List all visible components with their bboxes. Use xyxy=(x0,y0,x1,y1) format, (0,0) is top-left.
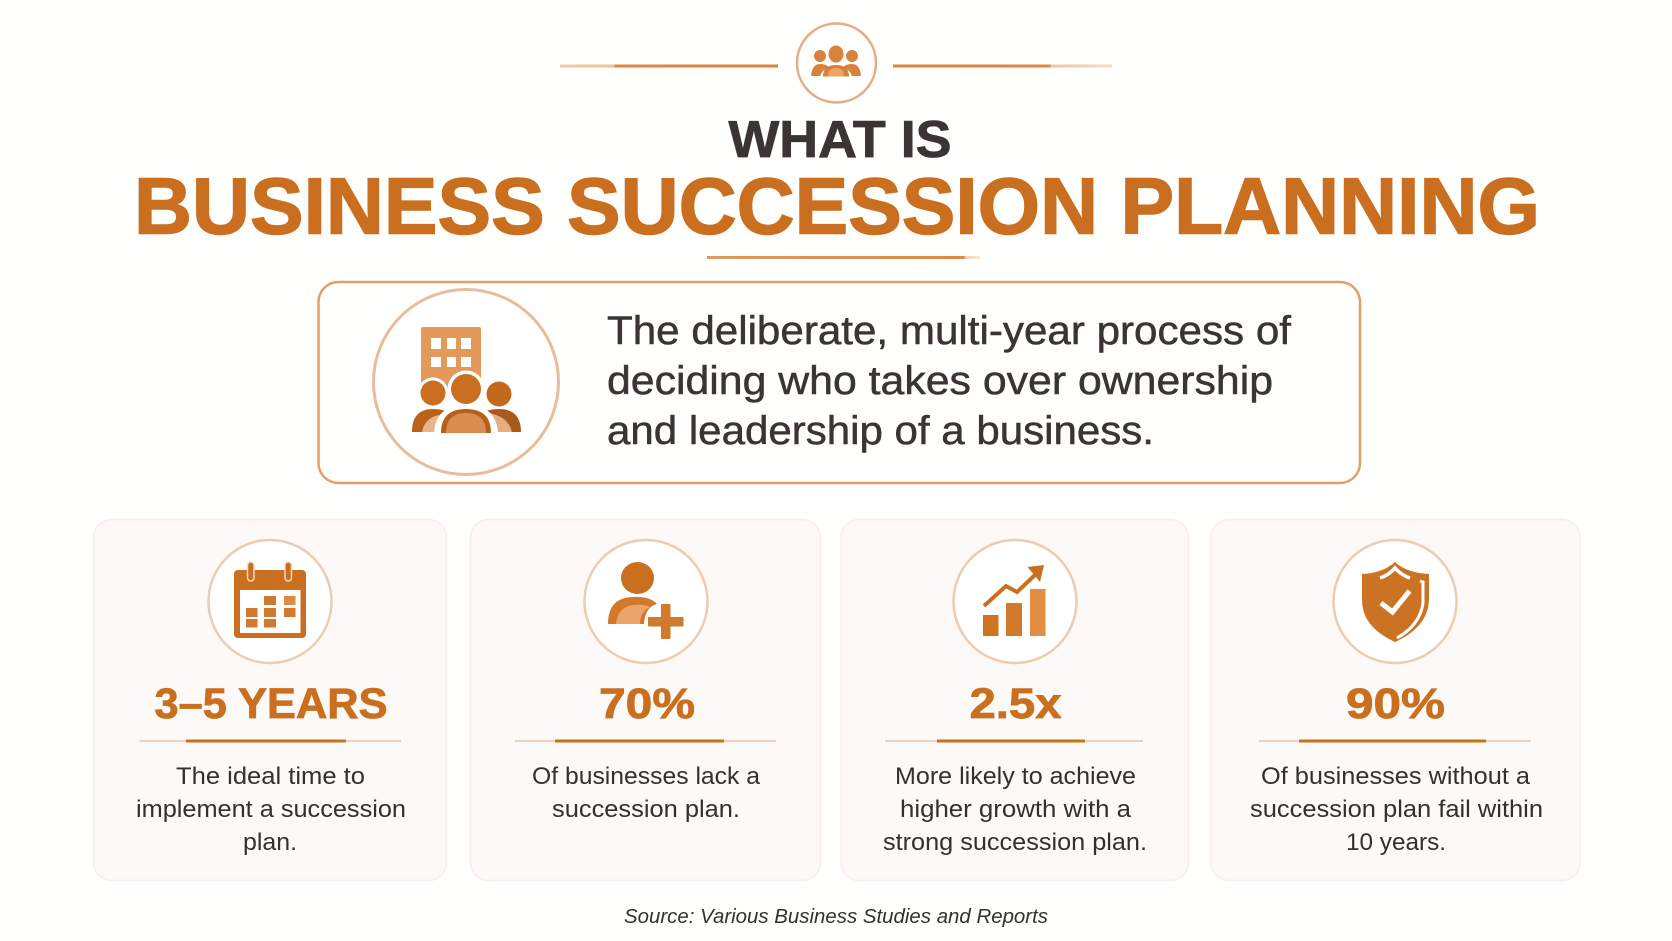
divider xyxy=(1259,740,1531,742)
stat: 2.5x: 2.5x xyxy=(970,680,1062,728)
stat: 70%: 70% xyxy=(599,680,695,728)
description: More likely to achieve xyxy=(895,763,1136,790)
description: succession plan. xyxy=(552,796,740,823)
stat: 90%: 90% xyxy=(1346,680,1445,728)
definition text: The deliberate, multi-year process of xyxy=(607,309,1292,353)
title line 1: WHAT IS xyxy=(728,111,952,169)
divider xyxy=(140,740,401,742)
definition text xyxy=(607,309,1292,453)
description xyxy=(883,763,1147,856)
divider xyxy=(515,740,776,742)
source note: Source: Various Business Studies and Reports xyxy=(624,905,1048,928)
panel: 2.5x stat card xyxy=(841,520,1188,880)
divider xyxy=(885,740,1143,742)
icon: growth chart xyxy=(954,540,1076,663)
stat: 3-5 years: 3–5 YEARS xyxy=(154,680,388,728)
description: Of businesses without a xyxy=(1261,763,1531,790)
description: succession plan fail within xyxy=(1250,796,1543,823)
panel: 3-5 years stat card xyxy=(94,520,446,880)
description xyxy=(532,763,761,823)
header ornament with people icon xyxy=(560,24,1112,102)
description: higher growth with a xyxy=(900,796,1132,823)
title line 2: BUSINESS SUCCESSION PLANNING xyxy=(134,162,1540,250)
description: 10 years. xyxy=(1346,829,1446,856)
definition text: and leadership of a business. xyxy=(607,409,1154,453)
panel: 90% stat card xyxy=(1211,520,1580,880)
description xyxy=(136,763,406,856)
icon: building with three people xyxy=(374,290,558,474)
description: implement a succession xyxy=(136,796,406,823)
panel: 70% stat card xyxy=(470,520,820,880)
title underline xyxy=(707,256,980,259)
icon: shield with check xyxy=(1334,540,1456,663)
description: plan. xyxy=(243,829,297,856)
description xyxy=(1250,763,1543,856)
description: The ideal time to xyxy=(176,763,365,790)
description: strong succession plan. xyxy=(883,829,1147,856)
icon: three people xyxy=(811,46,861,76)
panel: definition xyxy=(318,282,1360,483)
icon: person with plus xyxy=(584,540,708,663)
definition text: deciding who takes over ownership xyxy=(607,359,1273,403)
icon: calendar xyxy=(208,540,332,663)
description: Of businesses lack a xyxy=(532,763,761,790)
